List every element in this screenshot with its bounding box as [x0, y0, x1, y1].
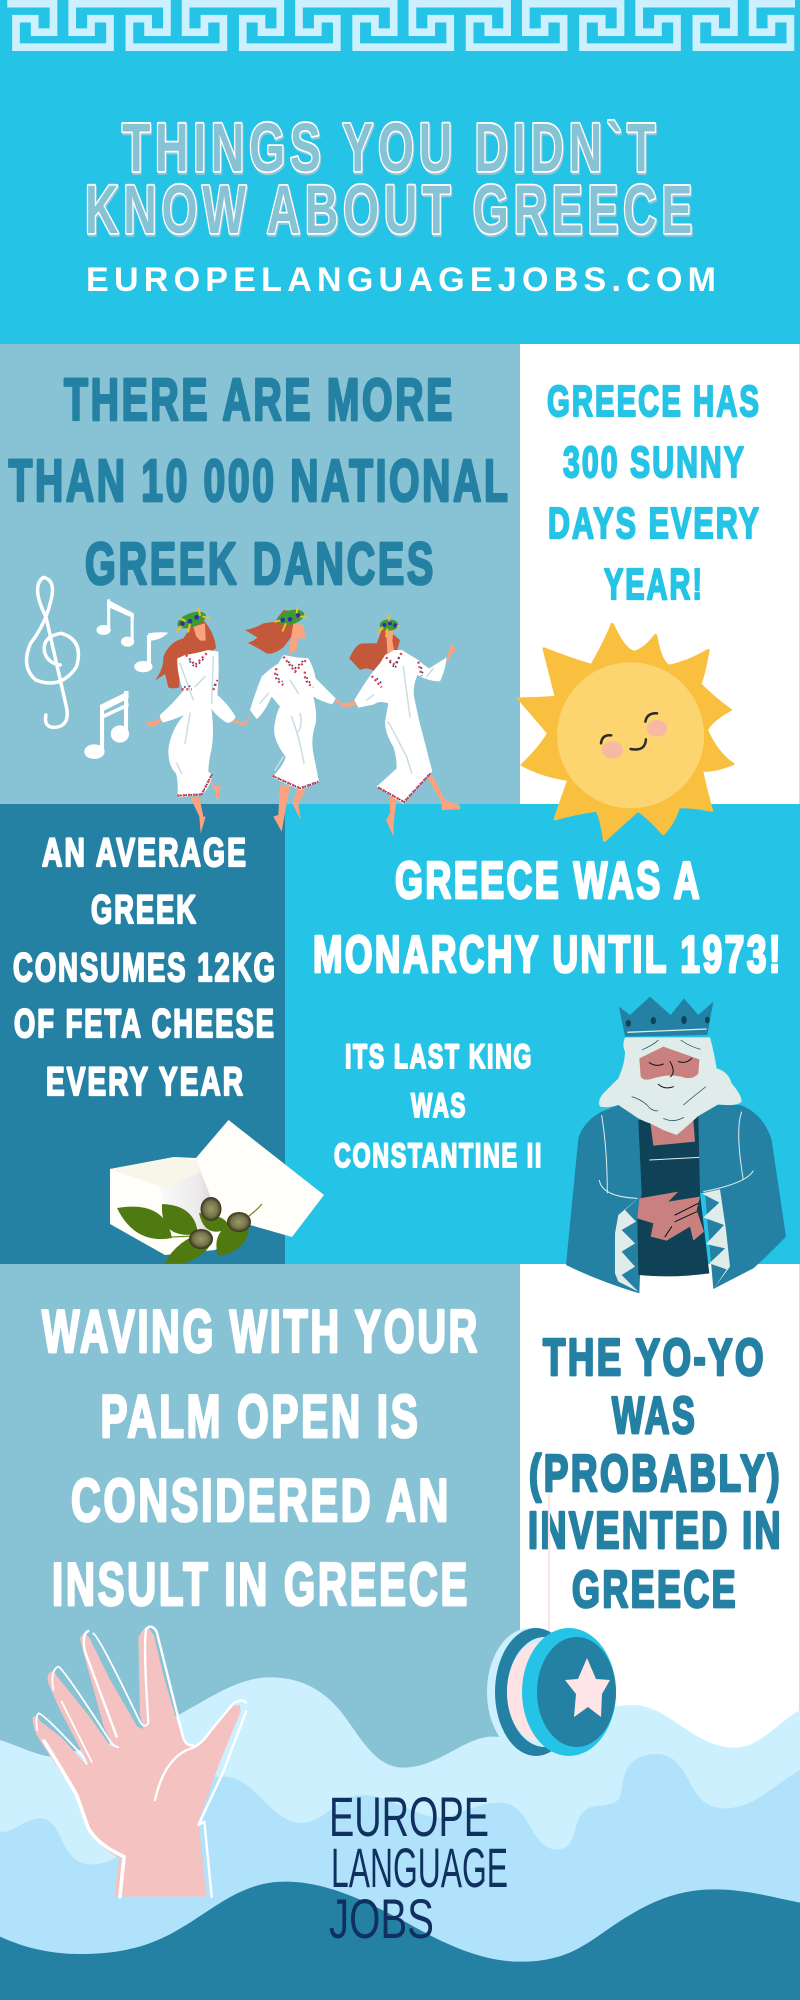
heading: waving: WAVING WITH YOUR — [42, 1298, 480, 1365]
logo: europe language jobs: LANGUAGE — [331, 1836, 508, 1899]
panel: sunny days background — [520, 344, 800, 804]
heading: feta cheese: OF FETA CHEESE — [14, 1002, 276, 1046]
heading: waving — [42, 1298, 480, 1618]
illustration: feta cheese with olives — [110, 1120, 324, 1268]
heading: feta cheese — [13, 831, 277, 1104]
dancer two — [245, 607, 357, 832]
heading: feta cheese: EVERY YEAR — [46, 1060, 245, 1104]
heading: monarchy — [313, 852, 783, 984]
website url: EUROPELANGUAGEJOBS.COM — [86, 261, 716, 299]
panel: waving background — [0, 1264, 520, 2000]
text: last king: CONSTANTINE II — [334, 1137, 543, 1175]
panel: dances background — [0, 344, 520, 804]
dancer three — [349, 615, 460, 837]
heading: national dances: GREEK DANCES — [85, 531, 436, 597]
title — [85, 109, 697, 248]
text: last king: WAS — [411, 1087, 467, 1125]
illustration: king constantine — [566, 997, 786, 1293]
icon: smiling sun — [518, 624, 733, 841]
icon: waving hand — [33, 1627, 246, 1897]
heading: yo-yo — [528, 1329, 783, 1619]
heading: national dances — [8, 367, 511, 597]
logo: europe language jobs: JOBS — [329, 1887, 434, 1950]
heading: feta cheese: AN AVERAGE — [42, 831, 248, 875]
panel: yo-yo background — [520, 1264, 800, 2000]
heading: sunny days: YEAR! — [604, 561, 704, 609]
dancer one — [145, 608, 252, 833]
logo: europe language jobs — [329, 1785, 508, 1950]
logo: europe language jobs: EUROPE — [329, 1785, 489, 1848]
heading: feta cheese: GREEK — [91, 888, 198, 932]
greek key border — [0, 4, 800, 47]
heading: feta cheese: CONSUMES 12KG — [13, 946, 277, 990]
heading: waving: CONSIDERED AN — [71, 1467, 451, 1534]
text: last king — [334, 1038, 543, 1175]
heading: waving: PALM OPEN IS — [100, 1383, 420, 1450]
panel: monarchy background — [285, 804, 800, 1264]
text: last king: ITS LAST KING — [345, 1038, 533, 1076]
waves background — [0, 1677, 800, 2000]
icon: music notes — [27, 577, 168, 759]
header panel — [0, 0, 800, 344]
heading: waving: INSULT IN GREECE — [52, 1551, 470, 1618]
icon: yo-yo — [487, 1494, 616, 1756]
heading: national dances: THERE ARE MORE — [64, 367, 455, 433]
panel: feta background — [0, 804, 285, 1264]
heading: yo-yo: WAS — [612, 1387, 697, 1445]
heading: national dances: THAN 10 000 NATIONAL — [8, 448, 511, 514]
heading: sunny days — [547, 378, 761, 609]
illustration: three dancers — [145, 607, 460, 837]
